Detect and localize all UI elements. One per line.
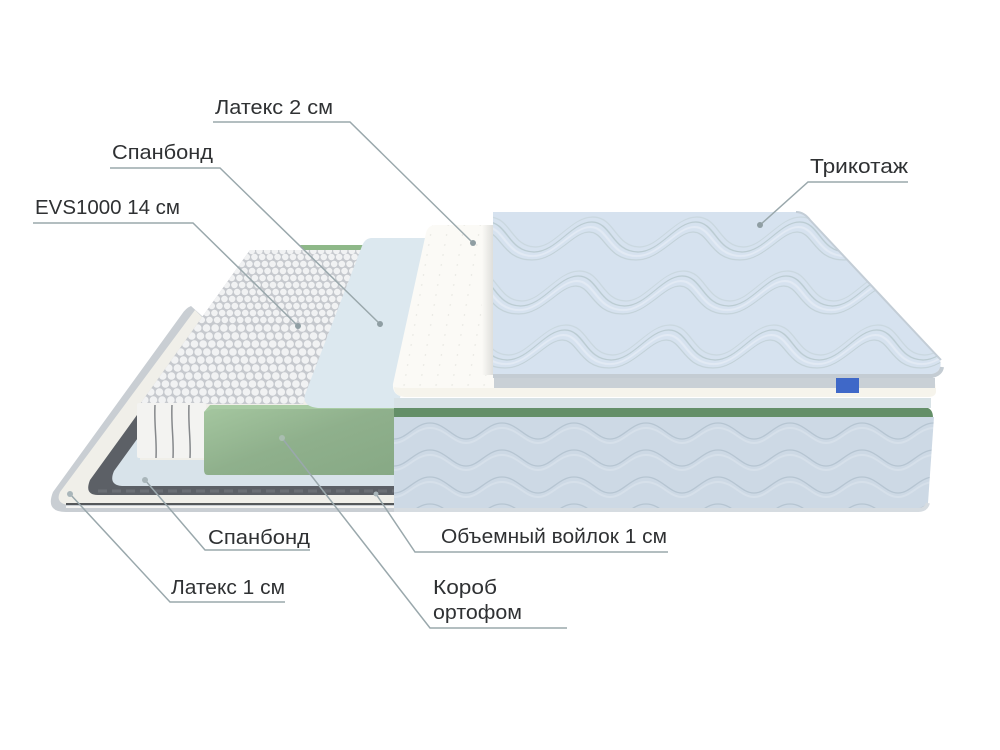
label: Трикотаж [757, 156, 909, 228]
label: Спанбонд bottom: Спанбонд [208, 527, 310, 549]
label: Объемный войлок 1 см: Объемный войлок 1 см [441, 526, 667, 548]
spring fronts [137, 403, 206, 458]
spunbond front strip [394, 398, 931, 408]
green strip [394, 408, 933, 418]
label: Объемный войлок 1 см [374, 492, 668, 552]
blue label tag [836, 378, 859, 393]
label: Спанбонд bottom [142, 477, 310, 550]
spunbond sheet [304, 238, 931, 408]
quilted knit top layer [493, 212, 942, 376]
label: Латекс 2 см: Латекс 2 см [215, 97, 333, 119]
label: EVS1000 14 см: EVS1000 14 см [35, 197, 180, 219]
lower spunbond sheet [112, 435, 394, 486]
label: Короб ортофом: ортофом [433, 602, 522, 624]
label: Латекс 1 см [67, 491, 285, 602]
pocket spring block [136, 250, 366, 458]
label: Короб ортофом: Короб [433, 577, 497, 599]
orthofoam back edge [300, 245, 365, 258]
label: Спанбонд top [110, 142, 383, 327]
label: EVS1000 14 см [33, 197, 301, 329]
label: Короб ортофом [279, 435, 567, 628]
mattress illustration [51, 212, 942, 512]
label: Трикотаж: Трикотаж [810, 156, 909, 178]
label: Спанбонд top: Спанбонд [112, 142, 213, 164]
label: Латекс 1 см: Латекс 1 см [171, 577, 285, 599]
quilted side panel [394, 417, 934, 510]
orthofoam box front [204, 405, 394, 475]
label: Латекс 2 см [213, 97, 476, 246]
latex 2 cm layer [393, 225, 936, 397]
base latex layer [51, 306, 928, 512]
felt layer [88, 415, 394, 495]
